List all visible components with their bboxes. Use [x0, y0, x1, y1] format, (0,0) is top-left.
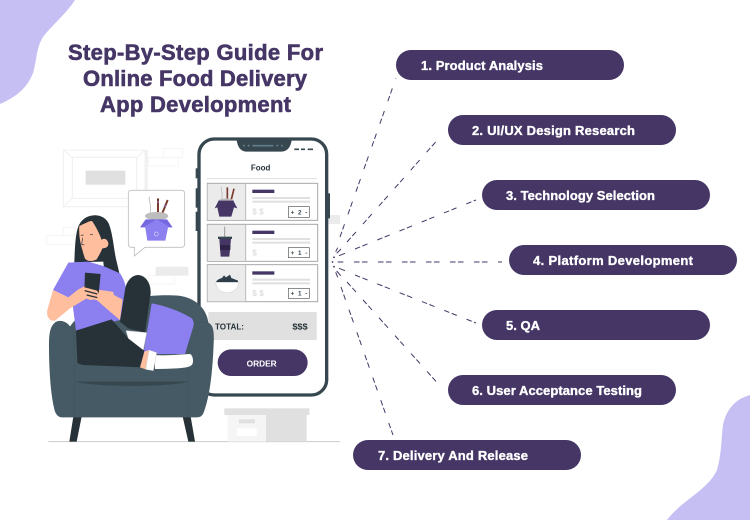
- facial features: [81, 234, 93, 245]
- fingers: [79, 286, 102, 300]
- blob: bottom right: [667, 395, 750, 520]
- held phone: [84, 273, 101, 297]
- step 5: [482, 310, 710, 340]
- food card 3: $$: [252, 289, 264, 298]
- dashed connector lines: [332, 78, 502, 435]
- floor line: [48, 440, 340, 443]
- storage box: [224, 408, 309, 442]
- step 3: 3. Technology Selection: [506, 188, 655, 203]
- step 4: [509, 245, 737, 275]
- phone: [196, 139, 330, 395]
- pillow: [143, 303, 194, 354]
- food card 1: + 2 -: [291, 209, 307, 216]
- order button: [218, 349, 308, 376]
- food card 3: + 1 -: [291, 291, 307, 298]
- total bar: [208, 312, 317, 340]
- speech bubble with noodle box: [128, 190, 185, 256]
- food card 2: [207, 224, 318, 261]
- blob: top left: [0, 0, 75, 104]
- step 2: [448, 115, 676, 145]
- step 3: [482, 180, 710, 210]
- screen heading: Food: [251, 164, 271, 173]
- step 4: 4. Platform Development: [533, 253, 694, 268]
- step 5: 5. QA: [506, 318, 541, 333]
- title: App Development: [100, 92, 292, 117]
- step 1: [396, 50, 624, 80]
- step 7: [353, 440, 581, 470]
- pants: [76, 319, 144, 367]
- step 2: 2. UI/UX Design Research: [472, 123, 635, 138]
- face: [79, 221, 108, 261]
- step 6: 6. User Acceptance Testing: [472, 383, 642, 398]
- step 6: [448, 375, 676, 405]
- armchair: [49, 295, 214, 442]
- food card 2: + 1 -: [291, 250, 307, 257]
- shirt sleeve over right arm: [108, 273, 126, 300]
- torso shirt: [53, 262, 126, 331]
- arms: [47, 286, 123, 321]
- food card 2: $: [252, 248, 257, 257]
- title: Online Food Delivery: [83, 66, 308, 91]
- hair: [74, 215, 120, 280]
- title: [68, 40, 323, 117]
- step 1: 1. Product Analysis: [421, 58, 543, 73]
- total bar: TOTAL:: [215, 321, 244, 331]
- title: Step-By-Step Guide For: [68, 40, 323, 65]
- order button: ORDER: [247, 358, 277, 368]
- food card 1: [207, 183, 318, 220]
- woman: [47, 215, 193, 371]
- background wall: frame and bricks: [47, 148, 340, 284]
- total bar: $$$: [292, 321, 308, 331]
- phone notch: [237, 140, 292, 152]
- food card 1: $$: [252, 208, 264, 217]
- illustration: woman ordering food on phone: [47, 139, 340, 442]
- socks: [126, 331, 147, 350]
- food card 3: [207, 265, 318, 302]
- step 7: 7. Delivery And Release: [378, 448, 528, 463]
